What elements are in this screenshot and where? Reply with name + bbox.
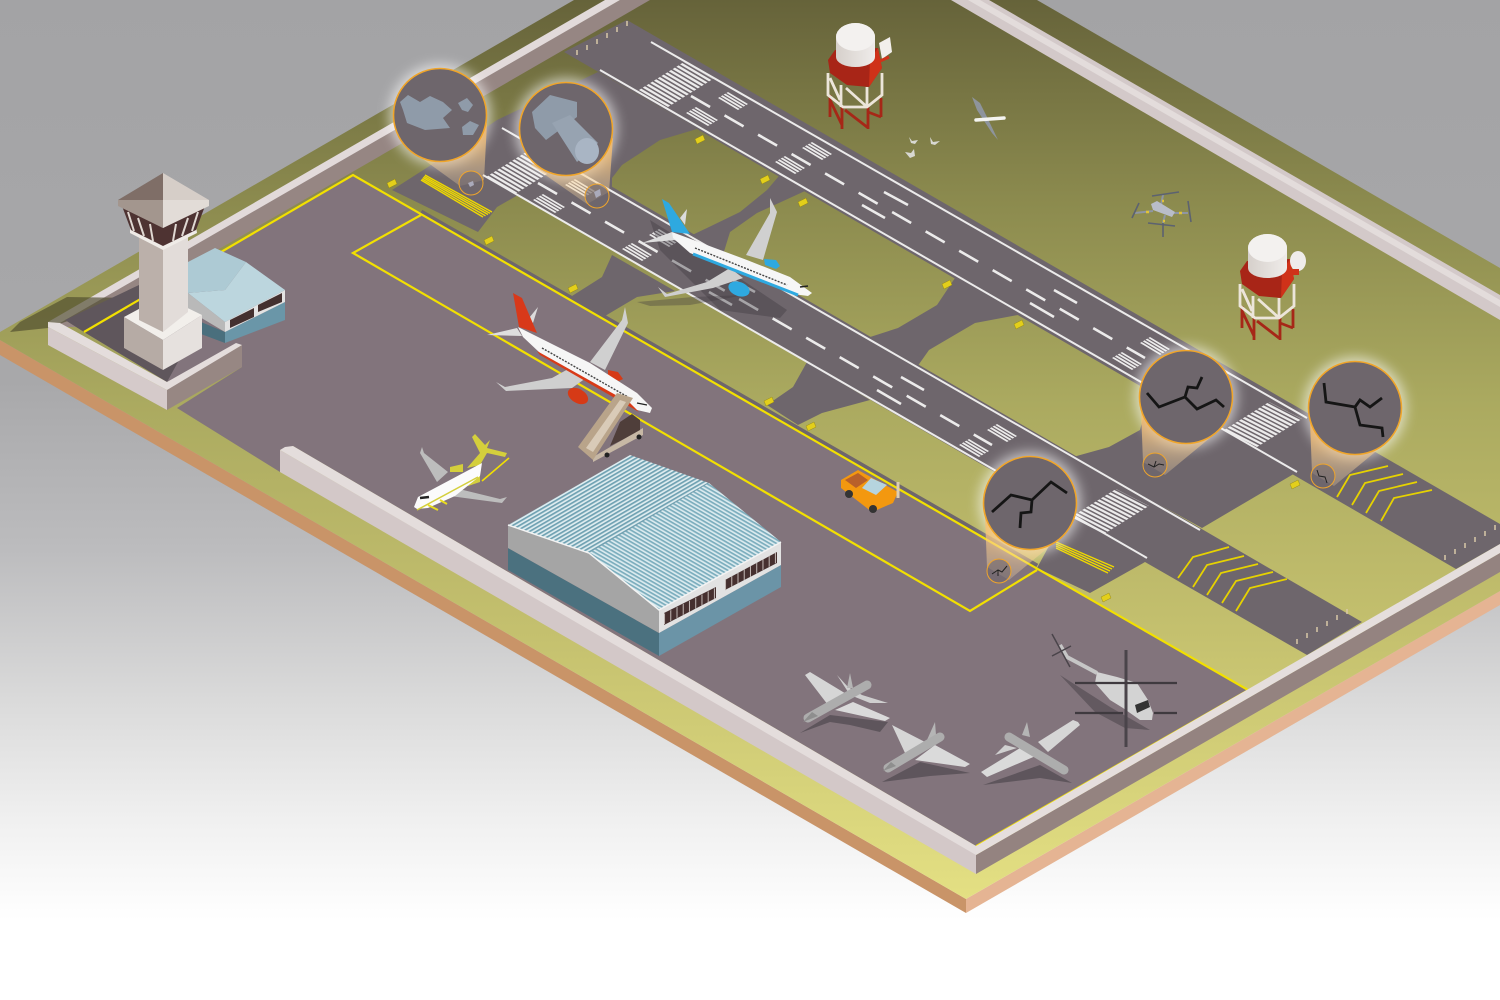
far wall upper right	[951, 0, 1500, 320]
fighter jet 1	[800, 672, 890, 733]
runway B markings	[500, 158, 1132, 526]
small gulls on ground	[905, 137, 940, 158]
inspection drone	[1132, 192, 1191, 237]
red airliner	[487, 293, 652, 413]
water tower 1	[828, 23, 892, 129]
small fin	[529, 307, 538, 323]
small wall around tower	[48, 322, 242, 410]
tail plane	[487, 328, 522, 336]
fighter jet 2	[882, 722, 970, 782]
fighter jet 3	[981, 720, 1080, 785]
wall upper left	[48, 0, 650, 327]
yellow business jet	[414, 434, 507, 510]
large hangar	[508, 455, 781, 656]
tower roof	[118, 173, 209, 228]
tower base	[124, 296, 202, 370]
blue airliner shadow	[650, 220, 787, 318]
blue airliner	[637, 198, 812, 318]
edge lights	[577, 21, 1495, 644]
far wing	[746, 198, 777, 260]
callout: debris rocks	[394, 68, 487, 195]
near wing	[496, 368, 586, 391]
fuselage	[518, 327, 652, 413]
far engine	[608, 370, 623, 381]
runway A surface	[564, 20, 1500, 569]
fuselage	[672, 232, 812, 296]
near wing	[658, 268, 743, 297]
runway edge lines	[483, 42, 1307, 558]
yellow hatch near runway start	[421, 175, 492, 217]
runway A markings	[654, 70, 1286, 438]
callout halos	[389, 64, 1406, 554]
callout: crack 1	[984, 456, 1076, 583]
tower cab windows	[122, 206, 205, 246]
wall lower left	[280, 446, 976, 874]
radar box	[879, 37, 892, 59]
tower shaft	[139, 232, 188, 332]
near engine	[726, 279, 752, 299]
yellow chevrons runway B end	[1178, 547, 1287, 611]
wall lower right	[976, 544, 1500, 874]
far wing	[590, 307, 628, 370]
yellow chevrons runway A end	[1337, 466, 1432, 521]
far engine	[764, 259, 780, 269]
water tower 2	[1240, 234, 1306, 340]
stair truck	[578, 393, 643, 462]
helicopter	[1052, 634, 1177, 747]
tail fin	[513, 293, 537, 333]
apron edge strip	[421, 212, 1037, 566]
runway B surface with taxiways	[392, 72, 1362, 655]
tower ground shadow on grass	[10, 297, 139, 332]
hangar windows	[664, 552, 777, 625]
small fin	[680, 209, 687, 225]
white cylinder	[836, 23, 875, 67]
tower frame	[828, 73, 882, 107]
runway signs	[387, 135, 1300, 602]
base: clay sides	[0, 340, 1500, 913]
callout: crack 3	[1308, 362, 1402, 488]
flying gull	[972, 97, 1004, 140]
red tank	[828, 48, 882, 87]
tower collar	[130, 226, 197, 250]
yellow hatch near runway end	[1056, 542, 1114, 573]
apron surface	[84, 175, 1248, 846]
tail plane	[642, 232, 675, 243]
callout: crack 2	[1140, 350, 1232, 477]
shaded apron by the tower	[65, 262, 190, 382]
tail fin	[662, 199, 690, 234]
small hangar	[188, 248, 285, 343]
near engine	[565, 384, 591, 408]
pickup truck	[841, 470, 898, 513]
tower legs	[830, 95, 881, 129]
callout: bolt	[520, 82, 613, 208]
yellow apron guide lines	[84, 175, 1248, 846]
control tower	[118, 173, 209, 370]
